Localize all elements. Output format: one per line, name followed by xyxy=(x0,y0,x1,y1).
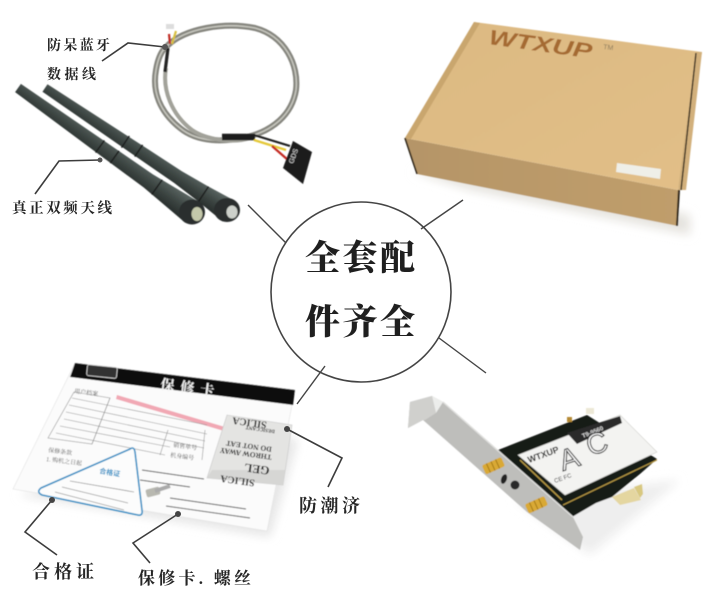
icon: PCIe wireless card: C xyxy=(582,426,612,463)
center circle with title xyxy=(271,202,451,382)
warranty card with accessories: DO NOT EAT xyxy=(225,439,272,454)
warranty card with accessories: 机身编号 xyxy=(170,451,195,462)
label: bluetooth data cable xyxy=(47,37,168,83)
label: certificate: 合格证 xyxy=(32,562,94,582)
connector lines to circle xyxy=(248,200,486,404)
warranty card with accessories: 保修卡 xyxy=(160,376,215,400)
label: bluetooth data cable: 数据线 xyxy=(47,66,96,83)
label: warranty card and screws xyxy=(133,511,251,588)
center circle with title: 件齐全 xyxy=(305,302,415,342)
warranty card with accessories: 合格证 xyxy=(99,466,121,479)
label: bluetooth data cable: 防呆蓝牙 xyxy=(47,37,110,54)
icon: bluetooth data cable xyxy=(155,24,312,184)
icon: dual band antennas xyxy=(11,78,240,225)
icon: PCIe wireless card: T9-9560 xyxy=(582,426,605,440)
label: desiccant xyxy=(284,426,360,516)
label: certificate xyxy=(25,497,94,582)
label: dual band antenna xyxy=(12,158,112,217)
warranty card with accessories xyxy=(13,363,298,537)
icon: cardboard box xyxy=(405,22,702,235)
icon: PCIe wireless card: CE FC xyxy=(554,473,573,485)
icon: bluetooth data cable: GDS xyxy=(288,148,300,165)
label: dual band antenna: 真正双频天线 xyxy=(12,199,112,217)
warranty card with accessories: 销售单号 xyxy=(173,441,198,452)
warranty card with accessories: GEL xyxy=(243,461,270,478)
center circle with title: 全套配 xyxy=(305,239,415,278)
icon: PCIe wireless card xyxy=(408,396,680,555)
label: warranty card and screws: 保修卡. 螺丝 xyxy=(138,568,251,588)
icon: cardboard box: WTXUP xyxy=(487,26,595,64)
icon: cardboard box: TM xyxy=(603,44,614,52)
warranty card with accessories: 保修条款 xyxy=(48,446,73,457)
warranty card with accessories: DESICCANT xyxy=(245,424,275,433)
warranty card with accessories: 1. 购机之日起 xyxy=(46,455,82,467)
warranty card with accessories: THROW AWAY xyxy=(219,446,272,462)
warranty card with accessories: SILICA xyxy=(219,472,255,488)
icon: PCIe wireless card: A xyxy=(555,441,584,478)
label: desiccant: 防潮济 xyxy=(299,495,360,516)
icon: PCIe wireless card: WTXUP xyxy=(526,444,560,465)
warranty card with accessories: 用户档案 xyxy=(74,387,99,398)
warranty card with accessories: SILICA xyxy=(231,414,267,430)
